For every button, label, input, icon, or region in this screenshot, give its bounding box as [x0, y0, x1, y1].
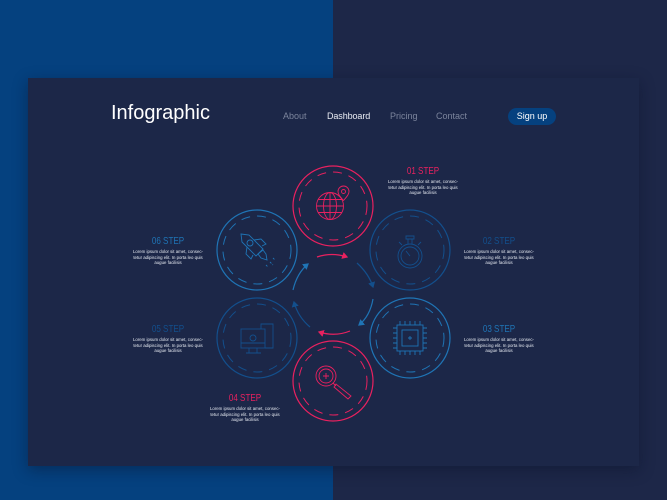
button: sign up	[508, 108, 556, 125]
body 05: Lorem ipsum dolor sit amet, consec-	[133, 337, 203, 342]
heading 02: 02 STEP	[483, 235, 515, 247]
icon: stopwatch	[398, 236, 422, 268]
heading 03: 03 STEP	[483, 323, 515, 335]
circle 06: rocket	[217, 210, 297, 290]
arrow: 06 to 01	[293, 264, 308, 290]
heading 05: 05 STEP	[152, 323, 184, 335]
button: sign up: Sign up	[517, 111, 547, 121]
step 03 text	[464, 323, 534, 353]
body 06: augue facilisis	[154, 260, 182, 265]
main panel	[28, 78, 639, 466]
body 06: Lorem ipsum dolor sit amet, consec-	[133, 249, 203, 254]
heading 01: 01 STEP	[407, 165, 439, 177]
arrow: 01 to 02	[317, 254, 347, 257]
body 04	[210, 406, 280, 422]
body 06: tetur adipiscing elit. In porta leo quis	[133, 255, 203, 260]
body 05	[133, 337, 203, 353]
body 04: Lorem ipsum dolor sit amet, consec-	[210, 406, 280, 411]
icon: chip	[393, 321, 427, 355]
icon: rocket	[241, 234, 275, 267]
nav: Contact: Contact	[436, 111, 467, 121]
icon: magnifier	[316, 366, 351, 399]
step 06 text	[133, 235, 203, 265]
title: Infographic	[111, 102, 210, 124]
background: left blue band	[0, 0, 333, 500]
body 02: Lorem ipsum dolor sit amet, consec-	[464, 249, 534, 254]
circle 03: chip	[370, 298, 450, 378]
step 02 text	[464, 235, 534, 265]
circle 02: stopwatch	[370, 210, 450, 290]
background: right navy band	[333, 0, 667, 500]
body 03	[464, 337, 534, 353]
circle 01: globe	[293, 166, 373, 246]
arrow: 03 to 04	[359, 299, 373, 325]
body 01: augue facilisis	[409, 190, 437, 195]
body 01: Lorem ipsum dolor sit amet, consec-	[388, 179, 458, 184]
body 02	[464, 249, 534, 265]
body 04: tetur adipiscing elit. In porta leo quis	[210, 412, 280, 417]
body 01	[388, 179, 458, 195]
arrow: 04 to 05	[319, 331, 350, 334]
nav: About: About	[283, 111, 307, 121]
body 04: augue facilisis	[231, 417, 259, 422]
step 01 text	[388, 165, 458, 195]
body 05: augue facilisis	[154, 348, 182, 353]
icon: monitor and tablet	[241, 324, 273, 353]
step 04 text	[210, 392, 280, 422]
body 03: augue facilisis	[485, 348, 513, 353]
heading 06: 06 STEP	[152, 235, 184, 247]
nav: Dashboard: Dashboard	[327, 111, 370, 121]
step 05 text	[133, 323, 203, 353]
body 02: augue facilisis	[485, 260, 513, 265]
heading 04: 04 STEP	[229, 392, 261, 404]
body 01: tetur adipiscing elit. In porta leo quis	[388, 185, 458, 190]
circle 04: magnifier	[293, 341, 373, 421]
body 03: tetur adipiscing elit. In porta leo quis	[464, 343, 534, 348]
arrow: 05 to 06	[294, 302, 310, 327]
circle 05: devices	[217, 298, 297, 378]
body 06	[133, 249, 203, 265]
body 02: tetur adipiscing elit. In porta leo quis	[464, 255, 534, 260]
icon: globe with pin	[316, 186, 349, 220]
body 03: Lorem ipsum dolor sit amet, consec-	[464, 337, 534, 342]
nav: Pricing: Pricing	[390, 111, 418, 121]
arrow: 02 to 03	[357, 263, 373, 287]
body 05: tetur adipiscing elit. In porta leo quis	[133, 343, 203, 348]
